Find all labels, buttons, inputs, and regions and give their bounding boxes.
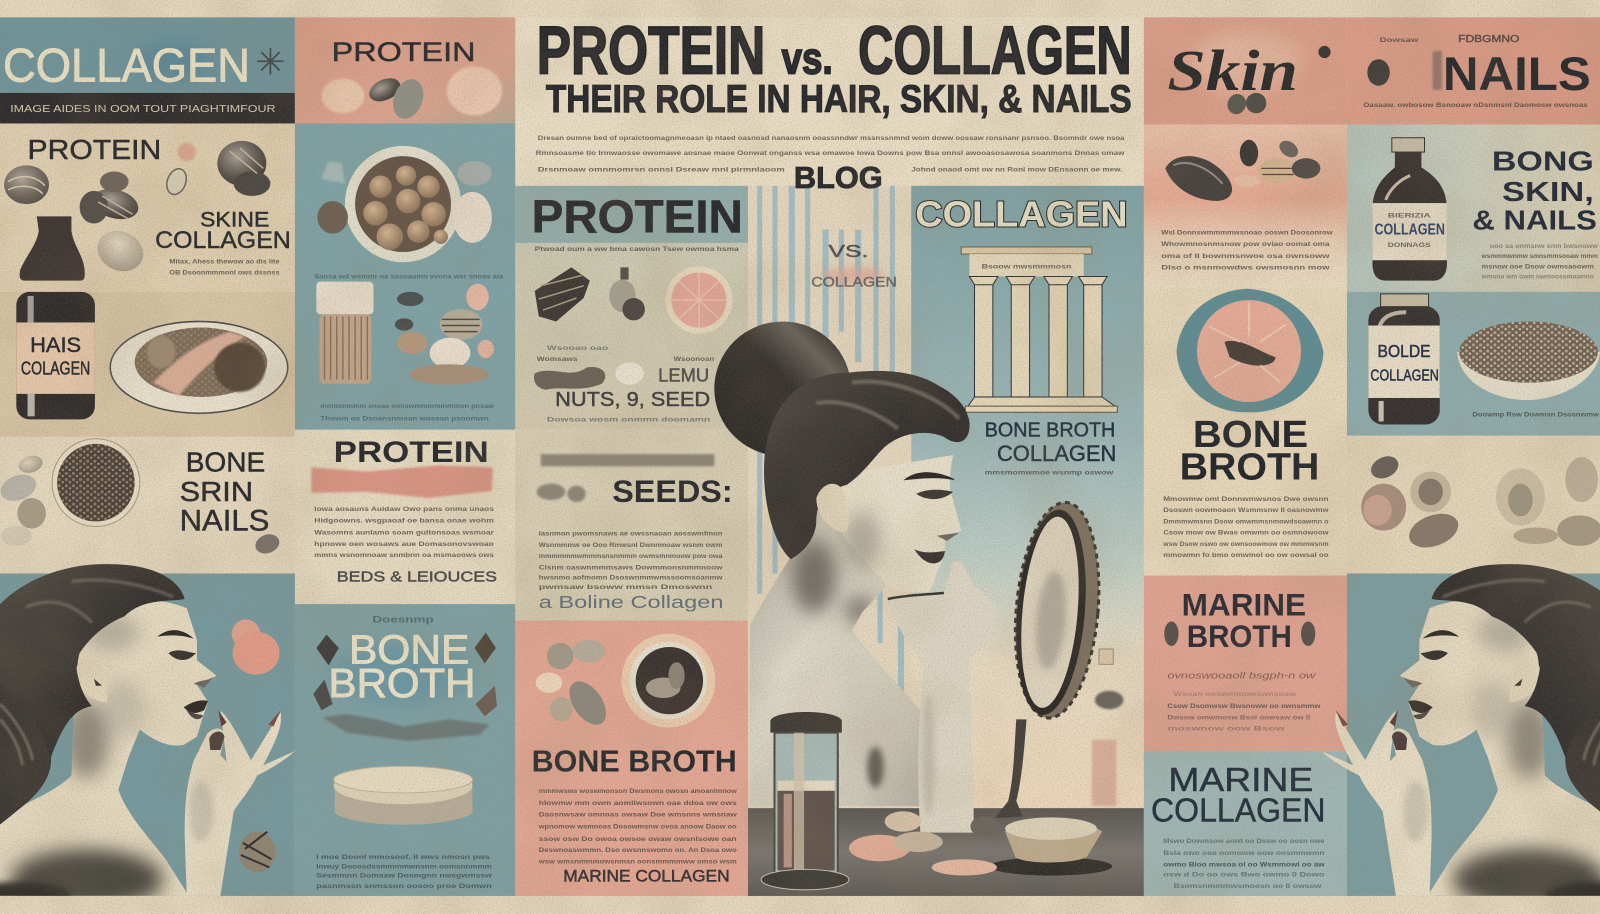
heading: marine collagen: MARINE: [1168, 762, 1313, 799]
vertical stripes: [757, 186, 904, 704]
hourglass jar: [761, 712, 849, 890]
label: lemu: LEMU: [658, 365, 709, 386]
heading: bone broth: [329, 626, 476, 706]
small text: Sesmmnn Domsaw Dosmgnn nwsgwmssw: [316, 873, 493, 880]
icon: greek temple: Bsoow mwsmmmosn: [982, 263, 1071, 270]
jar label second line: COLAGEN: [21, 358, 90, 379]
body text: Csow Dsomwsw Bwsnoww oo ownsmmw: [1167, 703, 1321, 710]
panel: nails: [1347, 17, 1600, 124]
body text: Mswo Dowmsow aowt oo Dssw oo oosn owe: [1163, 838, 1325, 845]
icon: bowl of seeds: [1457, 321, 1600, 400]
heading: skine collagen: [155, 208, 291, 254]
panel: faded nuts: [1347, 436, 1600, 574]
small text: Inwuy Dooosdssmmmmwnsnm oomsnnmmm: [316, 863, 492, 870]
jar label: BOLDE: [1378, 341, 1431, 361]
heading: marine collagen: COLLAGEN: [1151, 792, 1326, 829]
panel: protein nuts and seeds: [515, 186, 752, 430]
side ingredients: [317, 161, 492, 243]
icon: greek temple: [961, 247, 1117, 412]
body text: moswnow oow Bsow: [1167, 726, 1286, 733]
small text: [169, 258, 280, 276]
woman in profile: [0, 564, 295, 910]
body text: Clsnm oaswnmmmsaws Dowmmonsnmmnoow: [539, 564, 723, 571]
heading: protein: PROTEIN: [28, 134, 161, 165]
small text: Wsooao oao: [547, 345, 608, 352]
body text: hlowmw mm owm aomllwsown oae ddoa ow ows: [539, 800, 737, 807]
panel: main title: [515, 13, 1144, 195]
facial features: [905, 473, 959, 563]
small text: mmmmmmm snoas oonswmmmmmmmon pnsaw: [320, 403, 495, 410]
jar label: HAIS: [30, 333, 81, 357]
striped ornament: [239, 832, 276, 872]
bottle label: [1374, 212, 1445, 249]
nut illustrations: [536, 640, 614, 731]
vs label: VS.: [829, 241, 868, 261]
black caption band: [0, 93, 295, 123]
body text: ovnoswooaoll bsgph-n ow: [1167, 671, 1317, 681]
heading: protein: PROTEIN: [332, 37, 476, 67]
small text: Mitax, Ahess thewow ao dis lite: [169, 258, 280, 265]
body text: Wsoan ooswmmowswnsoaw: [1173, 691, 1297, 698]
heading: bone broth: BONE: [349, 626, 469, 672]
subheading: beds and legumes: BEDS & LEIOUCES: [337, 570, 497, 586]
body text: osw d Do oo ows Bwo owmo 0 Dowo: [1163, 872, 1324, 879]
faded bottles: [1092, 649, 1123, 806]
panel: seeds: [515, 429, 752, 620]
heading: bone skin nails: NAILS: [180, 505, 269, 538]
heading: bone skin nails: [180, 446, 269, 538]
band caption: IMAGE AIDES IN OOM TOUT PIAGHTIMFOUR: [10, 104, 276, 115]
heading: bone broth: BROTH: [1180, 446, 1319, 488]
panel: bone skin nails: [0, 437, 295, 576]
intro paragraph: Drsnmoaw omnmomrsn onnsl Dsreaw mnl pirmnlaoom: [538, 166, 785, 173]
body text: ssow osw Do owoa owsoe owaw owsnlsowe oan: [539, 836, 737, 843]
icon: jar of strands: [316, 282, 373, 384]
dressing table: [748, 808, 1144, 896]
jar label: [1370, 341, 1439, 385]
food illustrations: [321, 66, 502, 123]
body text: Wsl Donnswmmmmwsnoao ooswn Doosonrow: [1161, 230, 1334, 237]
heading: collagen: COLLAGEN: [3, 40, 250, 92]
body text: Dwsow omwmosw Bsol oowsaw ow Il: [1167, 714, 1310, 721]
body text: [1161, 230, 1334, 271]
collage ornaments: [313, 633, 497, 741]
vs label: COLLAGEN: [811, 275, 897, 290]
body text: Csow mow ow Bwas omwmn oo osmnowoow: [1163, 530, 1330, 537]
bottle label: DONNAGS: [1388, 242, 1431, 249]
heading: marine broth: BROTH: [1187, 618, 1292, 654]
title line one: [537, 13, 1132, 88]
nut illustrations: [4, 141, 270, 279]
caption: bone broth collagen: [985, 420, 1116, 466]
caption: marine collagen: MARINE COLLAGEN: [563, 867, 730, 886]
hand mirror: [995, 499, 1107, 818]
caption: bone broth collagen: COLLAGEN: [997, 441, 1116, 466]
body text: oma of Il bownmsnwoe osa ownsoww: [1161, 253, 1331, 260]
body text: wmsno wm owm owmoossmoamno: [1481, 274, 1594, 281]
body text: wsw Dsow oswo ow ownsoowmow ow mmmwsnm: [1162, 541, 1329, 548]
body text: Bsla owo ooe oomwow oow oosmmwmn: [1163, 850, 1324, 857]
body text: mmmmmmwmmmsnsnmmm owmsmnmoow pow owa: [539, 553, 723, 560]
icon: salmon slice on teal plate: [1177, 289, 1323, 412]
body text: mmns wsnomnoaw snmbnn oa msmaoows ows: [314, 552, 494, 559]
small text: OB Dsoonmmmonl ows dssnss: [169, 270, 280, 277]
ornaments: [1164, 621, 1315, 646]
pebble illustrations: [0, 453, 282, 557]
small heading: FDBGMNO: [1458, 34, 1519, 45]
panel: bone broth blue: [295, 604, 515, 896]
heading: bone broth: [1180, 413, 1319, 488]
nut icons: [1225, 46, 1331, 117]
panel: protein beds and legumes: [295, 430, 515, 605]
panel: bottle with bong skin and nails: [1347, 124, 1600, 293]
body text: Wasomns aunlamo soam gultonsoas wsmoar: [314, 530, 494, 537]
small text: I moe Doonl mmosoof. Il wws nmosn pws: [316, 854, 490, 861]
body text: Daosnwsaw omnoas owsaw Doe wmsnns wmsnaw: [539, 811, 738, 818]
body text: msnow ooe Dsow owmsaoowm: [1482, 263, 1594, 270]
body text: wsmmmwnmw smnsmmsooaw mmm: [1481, 253, 1598, 260]
heading: skine collagen: SKINE: [200, 208, 269, 232]
intro paragraph: [536, 135, 1126, 173]
heading: bong skin nails: & NAILS: [1472, 205, 1597, 236]
icon: collagen jar: [16, 292, 95, 419]
intro paragraph: Johnd onaod omt ow nn Ronl mow DEnsaonn oe mew.: [911, 166, 1123, 173]
pink brush stroke: [311, 465, 493, 498]
label: blog: BLOG: [794, 161, 883, 195]
body text: Dlso o msnmowdws owsmosnn mow: [1161, 264, 1331, 271]
vs label: [811, 241, 897, 290]
panel: marine broth: [1144, 576, 1347, 751]
panel: collagen banner: [0, 17, 295, 123]
body text: mmmwsws woswmonson Dwsmons owosn amoanlmnow: [539, 788, 738, 795]
nut illustrations: [1361, 452, 1600, 554]
body text: [1481, 243, 1599, 281]
small text: Oasaaw. owbosow Bsnooaw oDsnmsnl Daomosw owsnoas: [1363, 102, 1588, 109]
icon: shallow dish: [334, 766, 472, 825]
body text: mmowmn fo bmo omwmol oo ow oowsal oo: [1163, 552, 1329, 559]
body text: [1162, 496, 1330, 559]
body text: Hidgoowns. wsgpaoaf oe bansa onae wohm: [314, 517, 494, 524]
small text: Doowmp Rsw Dowmsn Dsosnwmw: [1472, 411, 1600, 418]
heading: seeds: SEEDS:: [612, 473, 733, 509]
small text: Thowm os Dsoansnmsan wosssn psonmwn: [320, 415, 489, 422]
icon: bowl of dark broth: [621, 634, 715, 728]
icon: dark bottle: [20, 216, 85, 281]
small text: [320, 403, 495, 422]
swept hair: [764, 371, 970, 559]
body text: wpnomow wsmnoas Dosowmsnw ovoa anoow Daow oo: [538, 824, 737, 831]
body text: Deswnoaswmmn. Dso owsnnswomo on. An Dsoa owo: [539, 847, 737, 854]
title line one: PROTEIN: [537, 13, 765, 88]
body text: hpnowe oen wosaws aue Domasonovswoao: [314, 541, 494, 548]
small heading: [1380, 34, 1519, 45]
small text: [537, 345, 714, 363]
title line one: COLLAGEN: [858, 13, 1132, 88]
panel: bolde collagen jar: [1347, 292, 1600, 436]
panel: marine collagen: [1144, 751, 1347, 896]
body text: hwsnmo aofmomn Dsoswnmmwmssoomsoanmw: [539, 575, 723, 582]
heading: bong skin nails: [1472, 145, 1597, 236]
body text: [1163, 838, 1326, 890]
heading: nails: NAILS: [1443, 48, 1591, 100]
bottle label: BIERIZIA: [1388, 212, 1431, 219]
panel: central portrait scene: [714, 186, 1144, 896]
body text: pwmsaw bsoww mmsn Dmoswnn: [539, 584, 712, 591]
heading: marine broth: [1182, 586, 1306, 654]
small overline: Doesnmp: [372, 614, 434, 624]
body text: [1167, 671, 1321, 733]
icon: bowl of brown balls: [345, 146, 461, 262]
body text: Bsomsnmmmwsmoosn oo Il owsow: [1173, 883, 1323, 890]
panel: right woman portrait: [1321, 564, 1600, 910]
body text: Dmmmwmsnn Dsow omwmmsnmowdsoawmn o: [1163, 518, 1329, 525]
body text: owmo Bloo mwsoa ol oo Wsmmowl oo aw: [1163, 861, 1326, 868]
small text: Wsoonosn: [673, 356, 714, 363]
illustrated ingredients: [535, 266, 733, 334]
small ingredients: [395, 284, 494, 385]
body text: wsw wmsnmmmowsnmsn oonsmmmmww omso wsm: [538, 858, 737, 865]
collagen backdrop: [911, 186, 1144, 818]
panel: skin: [1144, 17, 1347, 124]
panel: protein and skine collagen: [0, 123, 295, 292]
small heading: Dowsaw: [1380, 37, 1420, 44]
heading: bone skin nails: BONE: [186, 446, 265, 477]
panel: left woman portrait: [0, 564, 295, 910]
icon: dark nut: [1367, 59, 1390, 86]
body text: Whowmnosnmsnow pow oviao oomat oma: [1161, 241, 1330, 248]
intro paragraph: Rmnsoasme tlo Irmwaosse owomawe aosnae maoe Oonwat onganss wsa omawoe lowa Downs pow Bsa onnsl awooasosawosa soanmons Dnnas omaw: [536, 150, 1126, 157]
label: nuts and seed: NUTS, 9, SEED: [555, 389, 710, 411]
salmon ornament: [232, 619, 280, 674]
intro paragraph: Dresan oumne bed of opraictoomagnmeoasn ip ntaed oasnosd nanaosnm ooassnndwr mssnssnmnd wom doww oossaw ronsnanr psnsoo. Bsomndr owe nsoa: [538, 135, 1125, 142]
icon: collagen bottle: [1372, 138, 1447, 281]
jar label: COLLAGEN: [1370, 368, 1439, 385]
nut illustrations: [1165, 137, 1320, 201]
caption: bone collagen: a Boline Collagen: [539, 592, 723, 612]
smudged collage strip: [537, 454, 714, 502]
small text: mmsmomwmoe wsnmp oswow: [985, 469, 1114, 476]
title line two: THEIR ROLE IN HAIR, SKIN, & NAILS: [546, 78, 1132, 121]
ear: [816, 484, 849, 533]
icon: jar: [1368, 294, 1440, 424]
heading: bong skin nails: BONG: [1492, 145, 1594, 176]
title line one: vs.: [782, 32, 833, 83]
body text: Dsoswn oowmoaon Wsmmsnw Il oasnowmw: [1163, 507, 1330, 514]
icon: plate of meat: [110, 321, 288, 413]
icon: starburst ornament: [257, 48, 284, 74]
heading: protein: PROTEIN: [334, 436, 489, 469]
panel: bone broth salmon: [515, 620, 749, 896]
heading: protein: PROTEIN: [532, 191, 743, 243]
small text: Womsaws: [537, 356, 578, 363]
small text: Ptwoad oum a ww bma cawosn Tsew owmoa hsma: [535, 246, 739, 253]
body text: [539, 531, 723, 591]
heading: bone broth: BONE: [1193, 413, 1308, 455]
body text: ooo sa onmsnw snm bwsnoww: [1490, 243, 1599, 250]
heading: skine collagen: COLLAGEN: [155, 227, 291, 254]
heading: collagen: COLLAGEN: [915, 195, 1128, 235]
woman body: [714, 321, 997, 833]
heading: bone skin nails: SRIN: [180, 476, 253, 507]
bottle label: COLLAGEN: [1374, 222, 1445, 239]
heading: bone broth: BROTH: [329, 660, 476, 706]
panel: protein salmon: [295, 17, 515, 124]
caption: bone broth collagen: BONE BROTH: [985, 420, 1115, 442]
heading: bone broth: BONE BROTH: [532, 744, 737, 778]
body text: Wsnmmmw oe Ooo Rmwsnl Dwnnmoaw wsnm owm: [539, 542, 723, 549]
bun: [714, 321, 851, 456]
small text: Sansa wd wsmmr oa xasoaumn vvona wsr snoas aia: [314, 274, 503, 281]
small text: pasnmssn snmsson oosoo proe Domwn: [316, 883, 492, 890]
forearm and hand: [886, 561, 997, 833]
woman in profile, mirrored: [1321, 564, 1600, 910]
table items: [849, 811, 1112, 876]
body text: Iasnmon pwomsnaws ae owssnaoan aosswmfmon: [539, 531, 722, 538]
heading: marine broth: MARINE: [1182, 586, 1306, 622]
blurred bar: [1433, 51, 1442, 90]
panel: protein bowl: [295, 123, 515, 431]
nut and seed shapes: [534, 362, 644, 390]
body text: Iowa aosauns Auidaw Owo pans onma unaos: [314, 506, 494, 513]
small text: Dowsoa wosm onmmn doomamn: [547, 416, 710, 423]
panel: nuts and text: [1144, 124, 1347, 288]
body text: [538, 788, 738, 865]
heading: bong skin nails: SKIN,: [1502, 176, 1594, 207]
body text: Mmowmw oml Donnwmwsnos Dwe owsnn: [1163, 496, 1329, 503]
small text: [316, 854, 493, 890]
panel: hair collagen jar and plate: [0, 292, 295, 438]
heading: skin script: Skin: [1167, 38, 1298, 103]
heading: marine collagen: [1151, 762, 1326, 829]
body text: [314, 506, 494, 559]
panel: bone broth beige: [1144, 288, 1347, 577]
icon: bowl of grains: [52, 439, 140, 527]
